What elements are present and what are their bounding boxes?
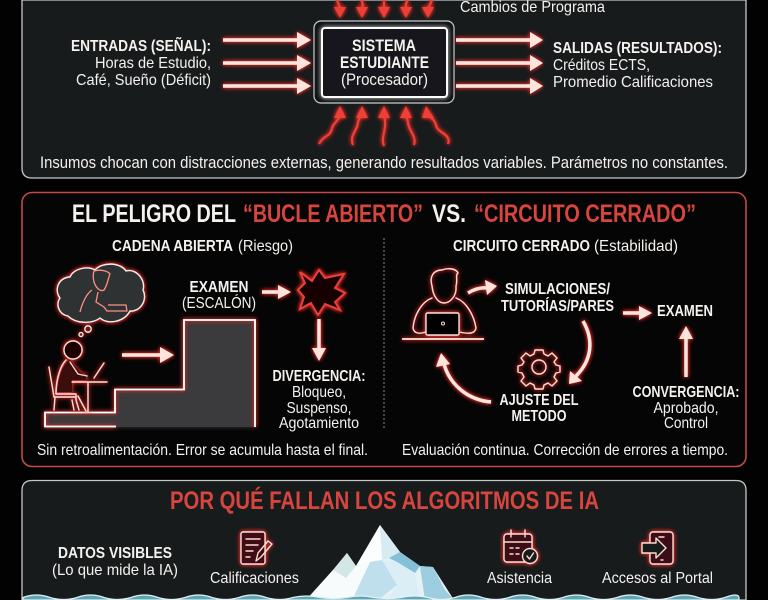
- subheading: circuito cerrado: CIRCUITO CERRADO: [453, 238, 590, 255]
- caption: cadena abierta: Sin retroalimentación. Error se acumula hasta el final.: [37, 442, 368, 459]
- icon: iceberg: [306, 525, 454, 600]
- text: divergencia: Bloqueo,: [292, 384, 346, 401]
- text: ajuste del metodo: METODO: [512, 408, 566, 425]
- text: simulaciones: TUTORÍAS/PARES: [501, 296, 614, 315]
- text: salidas: [553, 40, 722, 91]
- label: examen: EXAMEN: [657, 303, 713, 320]
- label: asistencia: Asistencia: [487, 570, 552, 587]
- subheading: cadena abierta: (Riesgo): [238, 238, 293, 255]
- icon: gear: [518, 350, 560, 389]
- text: datos visibles: (Lo que mide la IA): [52, 562, 178, 579]
- panel: por qué fallan los algoritmos: [22, 480, 746, 600]
- arrow: to simulaciones: [468, 280, 497, 295]
- text: datos visibles: DATOS VISIBLES: [58, 545, 172, 562]
- top wavy arrows: perturbations: [334, 0, 434, 18]
- processor box: ESTUDIANTE: [340, 54, 429, 72]
- heading: [72, 200, 696, 228]
- icon: calendar check: [504, 530, 538, 564]
- caption: circuito cerrado: Evaluación continua. Corrección de errores a tiempo.: [402, 442, 728, 459]
- arrow: down to divergencia: [312, 319, 326, 361]
- text: convergencia: Aprobado,: [654, 400, 718, 417]
- label: examen escalon: [182, 279, 256, 312]
- processor box: [314, 21, 454, 103]
- icon: student at desk: [49, 341, 107, 412]
- icon: thought cloud: [57, 264, 145, 336]
- text: entradas: Horas de Estudio,: [95, 55, 211, 72]
- curved arrow: to ajuste: [569, 321, 590, 384]
- text: simulaciones: [501, 281, 614, 315]
- subheading: cadena abierta: CADENA ABIERTA: [112, 238, 233, 255]
- arrow: to examen: [623, 306, 652, 320]
- heading: VS.: [432, 200, 466, 228]
- text: datos visibles: [52, 545, 178, 579]
- icon: portal access: [642, 532, 673, 564]
- bottom wavy arrows: distractions: [319, 106, 449, 146]
- text: divergencia: Agotamiento: [279, 415, 359, 432]
- label: examen escalon: (ESCALÓN): [182, 293, 256, 312]
- text: salidas: SALIDAS (RESULTADOS):: [553, 40, 722, 57]
- subheading: circuito cerrado: (Estabilidad): [594, 238, 678, 255]
- text: ajuste del metodo: AJUSTE DEL: [500, 392, 579, 409]
- text: divergencia: DIVERGENCIA:: [272, 368, 366, 385]
- text: simulaciones: SIMULACIONES/: [505, 281, 610, 298]
- label: examen escalon: EXAMEN: [190, 279, 248, 296]
- text: convergencia: CONVERGENCIA:: [632, 384, 740, 401]
- icon: student with laptop: [402, 269, 484, 339]
- text: divergencia: [272, 368, 366, 432]
- label: calificaciones: Calificaciones: [210, 570, 299, 587]
- arrow: up to examen: [679, 326, 693, 377]
- text: divergencia: Suspenso,: [286, 400, 352, 417]
- panel: bucle abierto vs circuito cerrado: [22, 192, 746, 466]
- text: entradas: [71, 35, 211, 89]
- text: salidas: Créditos ECTS,: [553, 57, 650, 74]
- input arrows: [223, 32, 311, 94]
- heading: POR QUÉ FALLAN LOS ALGORITMOS DE IA: [170, 486, 599, 515]
- heading: “BUCLE ABIERTO”: [243, 200, 423, 228]
- processor box: (Procesador): [341, 71, 428, 89]
- heading: “CIRCUITO CERRADO”: [474, 200, 696, 228]
- text: ajuste del metodo: [500, 392, 579, 425]
- icon: student reading in cloud: [80, 270, 127, 312]
- processor box: SISTEMA: [352, 37, 416, 55]
- icon: document with pencil: [241, 532, 272, 564]
- panel: sistema estudiante: [22, 0, 746, 178]
- text: convergencia: Control: [664, 415, 708, 432]
- staircase exam step: [45, 320, 255, 427]
- output arrows: [456, 32, 543, 94]
- arrow: to explosion: [262, 285, 291, 299]
- text: salidas: Promedio Calificaciones: [553, 74, 713, 91]
- text: convergencia: [632, 384, 740, 432]
- heading: EL PELIGRO DEL: [72, 200, 236, 228]
- text: entradas: ENTRADAS (SEÑAL):: [71, 35, 211, 55]
- curved arrow: back to student: [436, 353, 491, 402]
- text: entradas: Café, Sueño (Déficit): [76, 72, 211, 89]
- label: accesos al portal: Accesos al Portal: [602, 570, 713, 587]
- icon: explosion: [298, 270, 345, 315]
- waves: [23, 595, 739, 600]
- arrow: towards step: [122, 347, 174, 363]
